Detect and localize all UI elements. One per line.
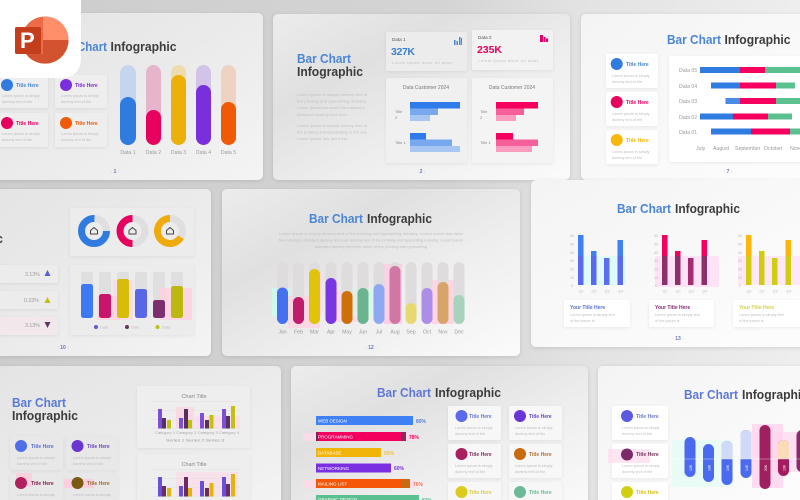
- cards: slide 15: Lorem ipsum is simply: [455, 426, 493, 430]
- pill bar chart: months: Aug: [390, 330, 400, 336]
- grouped bar chart: top: Chart Title: [181, 394, 207, 400]
- horizontal bar chart: skills: DATABASE: [318, 450, 341, 456]
- icon: PowerPoint logo corner: [0, 0, 81, 78]
- heading: slide 13: Infographic: [675, 202, 740, 216]
- column chart: yellow: [738, 234, 800, 294]
- column chart: yellow: Q1: [746, 290, 752, 294]
- stacked bar chart: slide 7: September: [735, 146, 761, 152]
- column chart: pink: [654, 234, 719, 294]
- bar chart: data customer blue: Data Customer 2024: [403, 85, 449, 91]
- stacked bar chart: slide 7: August: [713, 146, 730, 152]
- column chart: blue: 20: [570, 268, 574, 272]
- text block: slide 12: the industry's standard dummy text ever dummy text of the printing and typesetting industry. Lorem Ipsum: [279, 238, 463, 242]
- stat rows: slide 10: 3.13%: [25, 272, 40, 278]
- pill bar chart: months: Sep: [406, 330, 416, 336]
- column chart: blue: 30: [570, 259, 574, 263]
- cards: slide 7: Title Here: [626, 138, 649, 144]
- icon: PowerPoint logo corner: P: [20, 28, 35, 53]
- column chart: blue: Q3: [604, 290, 610, 294]
- horizontal bar chart: skills: 60%: [394, 466, 405, 472]
- column chart: pink: Q4: [702, 290, 707, 294]
- column chart: blue: 60: [570, 234, 574, 238]
- cards: slide 13: Lorem ipsum is simply text: [570, 313, 616, 317]
- bar chart: slide 10: Data: [162, 326, 171, 330]
- heading: slide 15: Infographic: [435, 386, 501, 400]
- cards: slide 7: dummy text of the: [612, 156, 642, 160]
- pill bar chart: months: Feb: [294, 330, 303, 336]
- panel: slide 7 stacked horizontal bars: [581, 14, 800, 180]
- cards: slide 15: Title Here: [469, 452, 492, 458]
- stat card: data 2: 235K: [477, 44, 502, 56]
- pill bar chart: months: Mar: [310, 330, 319, 336]
- column chart: yellow: 10: [738, 276, 742, 280]
- column chart: blue: 0: [571, 284, 573, 288]
- panel: slide 10 donuts and bars: [0, 189, 211, 356]
- stat card: data 2: [472, 30, 553, 70]
- column chart: yellow: Q3: [772, 290, 778, 294]
- info cards: slide 1: dummy text of the: [61, 100, 91, 104]
- column chart: pink: Q3: [688, 290, 694, 294]
- horizontal bar chart: skills: 76%: [413, 482, 424, 488]
- cards: slide 15: Title Here: [469, 490, 492, 496]
- pill bar chart: months: Oct: [423, 330, 432, 336]
- pill bar chart: months: Jul: [376, 330, 382, 336]
- cards: slide 14: [10, 436, 118, 500]
- cards: slide 15: Title Here: [529, 452, 552, 458]
- stat card: data 1: 327K: [391, 46, 415, 58]
- info cards: slide 1: Title Here: [16, 121, 39, 127]
- column chart: yellow: 20: [738, 268, 742, 272]
- heading: slide 7: Bar Chart: [667, 33, 722, 47]
- horizontal bar chart: skills: 80%: [416, 419, 427, 425]
- column chart: yellow: 50: [738, 242, 742, 246]
- panel: slide 13 quarterly charts: [531, 180, 800, 347]
- stacked bar chart: slide 7: Data 04: [679, 84, 697, 90]
- cards: slide 13: Your Title Here: [739, 305, 774, 311]
- stacked bar chart: slide 7: July: [696, 146, 706, 152]
- pill bar chart: months: Apr: [327, 330, 335, 336]
- info cards: slide 1: dummy text of the: [2, 100, 32, 104]
- stat card: data 2: Data 2: [478, 35, 492, 40]
- column chart: yellow: 60: [738, 234, 742, 238]
- bar chart: data customer pink: 2: [480, 115, 483, 120]
- cards: slide 13: of the ipsum is: [570, 319, 595, 323]
- pill bar chart: months: Jun: [359, 330, 367, 336]
- cards: slide 14: Title Here: [87, 481, 110, 487]
- pill bar chart: months: Dec: [454, 330, 464, 336]
- panel: slide 7 stacked horizontal bars: ‹ 7 ›: [724, 169, 733, 175]
- stacked bar chart: slide 7: Data 01: [679, 130, 697, 136]
- info cards: slide 1: [0, 75, 107, 147]
- horizontal bar chart: skills: MAILING LIST: [318, 482, 348, 486]
- column chart: pink: Q1: [662, 290, 668, 294]
- stat card: data 1: Data 1: [392, 37, 406, 42]
- text block: slide 12: standard dummy text ever since of the printing and typesetting: [315, 245, 427, 249]
- cards: slide 14: Title Here: [87, 444, 110, 450]
- grouped bar chart: bottom: Chart Title: [181, 462, 207, 468]
- pill bar chart: slide 1: Data 5: [221, 150, 236, 156]
- pill bar chart: slide 1: Data 3: [171, 150, 186, 156]
- text block: slide 12: [279, 232, 463, 249]
- cards: slide 16: Title Here: [636, 452, 659, 458]
- cards: slide 15: dummy text of the: [455, 432, 485, 436]
- pill bar chart: slide 1: Data 4: [196, 150, 211, 156]
- horizontal bar chart: skills: WEB DESIGN: [318, 418, 347, 424]
- stat card: data 2: Lorem ipsum dolor sit amet: [478, 59, 539, 63]
- grouped bar chart: bottom: [137, 454, 250, 500]
- pill bar chart: slide 16: 10K: [726, 464, 730, 471]
- panel: slide 14 grouped bars: [0, 366, 281, 500]
- info cards: slide 1: Lorem ipsum is simply: [2, 94, 40, 98]
- info cards: slide 1: Title Here: [75, 121, 98, 127]
- horizontal bar chart: skills: [303, 416, 433, 500]
- cards: slide 16: Title Here: [636, 490, 659, 496]
- panel: slide 2 customer data: ‹ 2 ›: [417, 169, 426, 175]
- panel: slide 13 quarterly charts: ‹ 13 ›: [672, 336, 684, 342]
- pill bar chart: slide 1: Data 2: [146, 150, 161, 156]
- cards: slide 7: dummy text of the: [612, 118, 642, 122]
- heading: slide 14: Infographic: [12, 409, 78, 423]
- heading: slide 1: Infographic: [110, 40, 177, 54]
- bar chart: slide 10: [70, 265, 194, 335]
- text block: slide 2: Lorem ipsum is simply dummy text of: [297, 93, 368, 97]
- pill bar chart: slide 1: Data 1: [120, 150, 136, 156]
- info cards: slide 1: Lorem ipsum is simply: [61, 94, 99, 98]
- column chart: yellow: 40: [738, 251, 742, 255]
- heading: slide 12: Bar Chart: [309, 212, 364, 226]
- column chart: yellow: Q4: [786, 290, 791, 294]
- cards: slide 7: Lorem ipsum is simply: [612, 150, 650, 154]
- panel: slide 2 customer data: [273, 14, 570, 180]
- bar chart: data customer pink: Title: [480, 109, 488, 114]
- column chart: pink: 60: [654, 234, 658, 238]
- column chart: blue: Q1: [578, 290, 584, 294]
- heading: slide 16: Bar Chart: [684, 388, 739, 402]
- panel: slide 12 monthly pill bars: ‹ 12 ›: [365, 345, 377, 351]
- cards: slide 15: Title Here: [529, 414, 552, 420]
- heading: slide 2: Infographic: [297, 65, 363, 79]
- text block: slide 12: Lorem ipsum is simply dummy text of the printing and typesetting industry. Lorem Ipsum has been: [279, 232, 463, 236]
- panel: slide 16 floating pill bars: [598, 366, 800, 500]
- heading: slide 1: Chart: [77, 40, 108, 54]
- bar chart: data customer blue: [386, 78, 467, 163]
- heading: slide 14: [12, 396, 78, 423]
- text block: slide 2: the printing and typesetting industry.: [297, 100, 367, 104]
- cards: slide 7: dummy text of the: [612, 80, 642, 84]
- cards: slide 14: Title Here: [31, 444, 54, 450]
- panel: slide 1 stacked pill bars: [0, 13, 263, 180]
- cards: slide 13: of the ipsum is: [655, 319, 680, 323]
- text block: slide 2: the printing and typesetting in the any: [297, 130, 367, 134]
- stat rows: slide 10: [0, 265, 58, 335]
- column chart: pink: 0: [655, 284, 657, 288]
- cards: slide 14: Lorem ipsum is simply: [73, 493, 111, 497]
- pill bar chart: months: Nov: [438, 330, 448, 336]
- stacked bar chart: slide 7: Data 03: [679, 99, 697, 105]
- stacked bar chart: slide 7: Data 05: [679, 68, 697, 74]
- column chart: pink: Q2: [676, 290, 681, 294]
- panel: slide 10 donuts and bars: ‹ 10 ›: [57, 345, 69, 351]
- column chart: yellow: Q2: [760, 290, 765, 294]
- cards: slide 13: Lorem ipsum is simply text: [739, 313, 785, 317]
- cards: slide 14: dummy text of the: [17, 462, 47, 466]
- column chart: yellow: 0: [739, 284, 741, 288]
- cards: slide 14: dummy text of the: [73, 462, 103, 466]
- cards: slide 14: Lorem ipsum is simply: [73, 456, 111, 460]
- pill bar chart: slide 16: 20K: [764, 464, 768, 471]
- column chart: blue: 50: [570, 242, 574, 246]
- cards: slide 13: [564, 300, 800, 327]
- info cards: slide 1: Title Here: [16, 83, 39, 89]
- column chart: blue: Q2: [592, 290, 597, 294]
- grouped bar chart: top: Category 1 Category 2 Category 3 Category 4: [155, 431, 239, 435]
- cards: slide 13: Your Title Here: [570, 305, 605, 311]
- info cards: slide 1: Lorem ipsum is simply: [61, 132, 99, 136]
- text block: slide 2: Lorem ipsum is simply dummy text of: [297, 124, 368, 128]
- pill bar chart: slide 16: 14K: [745, 464, 749, 471]
- cards: slide 15: Lorem ipsum is simply: [515, 426, 553, 430]
- heading: slide 2: Bar Chart: [297, 52, 352, 66]
- horizontal bar chart: skills: NETWORKING: [318, 466, 349, 471]
- heading: slide 15: Bar Chart: [377, 386, 432, 400]
- cards: slide 13: Your Title Here: [655, 305, 690, 311]
- stat rows: slide 10: 3.13%: [25, 323, 40, 329]
- bar chart: data customer blue: Title 1: [395, 140, 407, 145]
- pill bar chart: slide 16: 16K: [782, 464, 786, 471]
- column chart: pink: 10: [654, 276, 658, 280]
- horizontal bar chart: skills: 78%: [409, 435, 420, 441]
- horizontal bar chart: skills: 55%: [384, 451, 395, 457]
- bar chart: data customer pink: [472, 78, 553, 163]
- cards: slide 13: Lorem ipsum is simply text: [655, 313, 701, 317]
- cards: slide 14: Lorem ipsum is simply: [17, 493, 55, 497]
- cards: slide 15: Title Here: [529, 490, 552, 496]
- heading: slide 2: [297, 52, 363, 79]
- info cards: slide 1: dummy text of the: [2, 138, 32, 142]
- cards: slide 15: dummy text of the: [515, 432, 545, 436]
- pill bar chart: months: Jan: [278, 330, 287, 336]
- info cards: slide 1: dummy text of the: [61, 138, 91, 142]
- bar chart: data customer blue: 2: [395, 115, 398, 120]
- info cards: slide 1: Title Here: [75, 83, 98, 89]
- column chart: yellow: 30: [738, 259, 742, 263]
- text block: slide 2: [297, 93, 368, 141]
- pill bar chart: months: May: [342, 330, 352, 336]
- heading: slide 13: Bar Chart: [617, 202, 672, 216]
- cards: slide 14: Lorem ipsum is simply: [17, 456, 55, 460]
- grouped bar chart: top: [137, 386, 250, 448]
- cards: slide 7: Title Here: [626, 100, 649, 106]
- panel: slide 15 skills bars: [291, 366, 588, 500]
- bar chart: data customer pink: Title 1: [480, 140, 492, 145]
- cards: slide 15: Title Here: [469, 414, 492, 420]
- pill bar chart: slide 1: [120, 65, 236, 156]
- cards: slide 15: dummy text of the: [455, 470, 485, 474]
- cards: slide 16: Lorem ipsum is simply: [622, 464, 660, 468]
- stat rows: slide 10: 0.23%: [24, 298, 39, 304]
- cards: slide 16: [608, 406, 668, 500]
- pill bar chart: months: [272, 262, 464, 336]
- cards: slide 7: [606, 54, 658, 164]
- cards: slide 13: of the ipsum is: [739, 319, 764, 323]
- pill bar chart: slide 16: [672, 424, 800, 489]
- bar chart: data customer pink: Data Customer 2024: [489, 85, 535, 91]
- column chart: pink: 50: [654, 242, 658, 246]
- column chart: blue: 10: [570, 276, 574, 280]
- cards: slide 16: dummy text of the: [622, 470, 652, 474]
- text block: slide 2: Lorem Ipsum has been the industry's: [297, 106, 365, 110]
- heading: slide 12: Infographic: [367, 212, 432, 226]
- cards: slide 15: dummy text of the: [515, 470, 545, 474]
- donut charts: slide 10: [70, 208, 194, 256]
- panel: slide 12 monthly pill bars: [222, 189, 520, 356]
- cards: slide 15: [448, 406, 562, 500]
- stacked bar chart: slide 7: Data 02: [679, 115, 697, 121]
- grouped bar chart: top: Series 1 Series 2 Series 3: [166, 438, 224, 442]
- bar chart: data customer blue: Title: [395, 109, 403, 114]
- cards: slide 16: Lorem ipsum is simply: [622, 426, 660, 430]
- column chart: pink: 20: [654, 268, 658, 272]
- cards: slide 16: dummy text of the: [622, 432, 652, 436]
- cards: slide 15: Lorem ipsum is simply: [515, 464, 553, 468]
- column chart: pink: 30: [654, 259, 658, 263]
- pill bar chart: slide 16: 12K: [689, 464, 693, 471]
- horizontal bar chart: skills: PROGRAMMING: [318, 434, 354, 440]
- cards: slide 14: Title Here: [31, 481, 54, 487]
- cards: slide 7: Title Here: [626, 62, 649, 68]
- column chart: pink: 40: [654, 251, 658, 255]
- column chart: blue: Q4: [618, 290, 623, 294]
- cards: slide 7: Lorem ipsum is simply: [612, 74, 650, 78]
- pill bar chart: slide 16: 18K: [708, 464, 712, 471]
- column chart: blue: 40: [570, 251, 574, 255]
- column chart: blue: [570, 234, 626, 294]
- text block: slide 2: standard dummy text ever: [297, 113, 348, 117]
- stacked bar chart: slide 7: [669, 56, 800, 162]
- cards: slide 15: Lorem ipsum is simply: [455, 464, 493, 468]
- cards: slide 16: Title Here: [636, 414, 659, 420]
- stat card: data 1: [386, 32, 467, 71]
- bar chart: slide 10: Data: [100, 326, 109, 330]
- stat card: data 1: Lorem ipsum dolor sit amet: [392, 61, 453, 65]
- heading: slide 7: Infographic: [724, 33, 791, 47]
- stacked bar chart: slide 7: October: [764, 146, 783, 152]
- panel: slide 1 stacked pill bars: ‹ 1 ›: [111, 169, 120, 175]
- text block: slide 2: Lorem Ipsum has been the: [297, 137, 347, 141]
- heading: slide 14: Bar Chart: [12, 396, 67, 410]
- cards: slide 7: Lorem ipsum is simply: [612, 112, 650, 116]
- bar chart: slide 10: Data: [131, 326, 140, 330]
- info cards: slide 1: Lorem ipsum is simply: [2, 132, 40, 136]
